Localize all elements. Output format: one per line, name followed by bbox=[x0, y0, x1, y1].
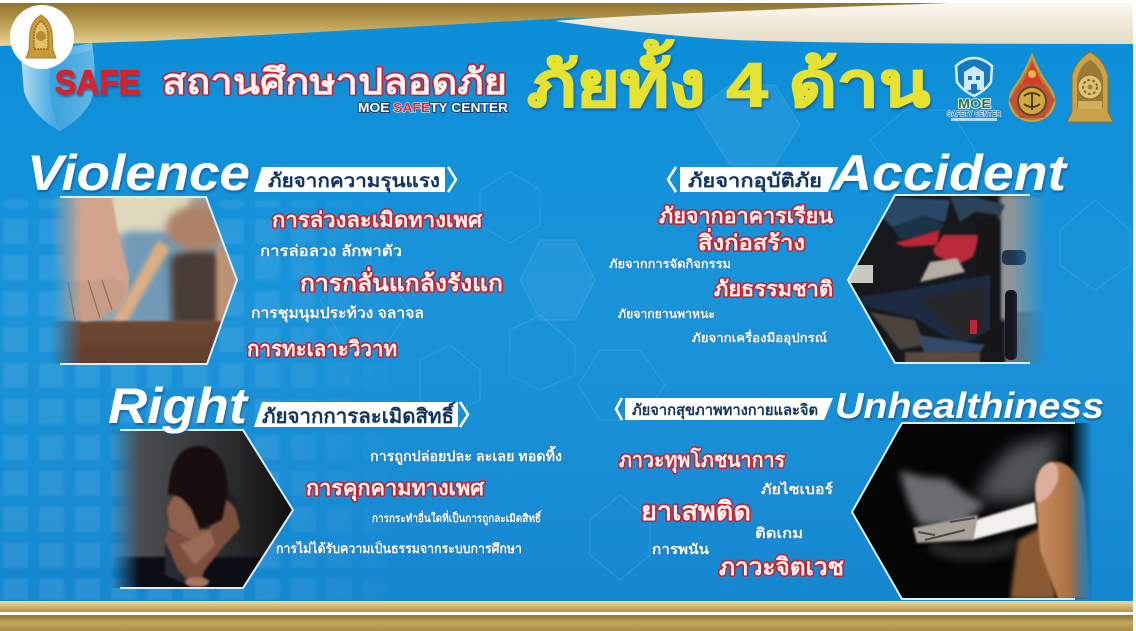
item: สิ่งก่อสร้าง bbox=[698, 227, 805, 255]
logo: MOE safety center: MOE bbox=[958, 96, 991, 111]
heading: Accident: Accident bbox=[830, 145, 1069, 201]
panel: right bbox=[100, 378, 562, 592]
logo: red and gold seal bbox=[1009, 55, 1055, 121]
title: SAFE: SAFE bbox=[55, 64, 140, 102]
panel: violence bbox=[27, 145, 503, 371]
photo border bbox=[848, 195, 1030, 363]
item: การล่วงละเมิดทางเพศ bbox=[272, 209, 483, 232]
photo: girl hugging knees bbox=[111, 430, 292, 588]
item: ภัยจากยานพาหนะ bbox=[618, 307, 715, 321]
photo: burning cigarette bbox=[850, 423, 1095, 601]
item: ภัยธรรมชาติ bbox=[714, 278, 833, 301]
item: การกระทำอื่นใดที่เป็นการถูกละเมิดสิทธิ์ bbox=[372, 510, 542, 526]
photo border bbox=[120, 430, 293, 588]
item: ภัยจากเครื่องมืออุปกรณ์ bbox=[692, 329, 827, 346]
item: การคุกคามทางเพศ bbox=[306, 477, 485, 502]
logo: gold emblem bbox=[1067, 52, 1113, 122]
item: การชุมนุมประท้วง จลาจล bbox=[251, 305, 424, 323]
tag: violence danger: ภัยจากความรุนแรง bbox=[268, 171, 440, 193]
cream swoosh bbox=[555, 3, 1133, 44]
item: การทะเลาะวิวาท bbox=[247, 338, 397, 361]
item: ภัยจากการจัดกิจกรรม bbox=[609, 257, 731, 271]
item: การกลั่นแกล้งรังแก bbox=[300, 266, 503, 296]
item: ภาวะทุพโภชนาการ bbox=[619, 447, 786, 474]
item: ติดเกม bbox=[755, 525, 803, 541]
item: ภัยจากอาคารเรียน bbox=[659, 204, 834, 228]
tag: accident danger: ภัยจากอุบัติภัย bbox=[688, 171, 822, 193]
photo border bbox=[852, 423, 1075, 599]
tag: rights violation danger: ภัยจากการละเมิดสิทธิ์ bbox=[262, 401, 456, 428]
tag: accident danger bbox=[668, 167, 838, 193]
item: การล่อลวง ลักพาตัว bbox=[260, 243, 402, 260]
title: four dangers: ภัยทั้ง 4 ด้าน bbox=[527, 39, 930, 120]
tag: physical and mental health danger: ภัยจากสุขภาพทางกายและจิต bbox=[632, 401, 818, 420]
shield graphic bbox=[21, 43, 95, 131]
item: การไม่ได้รับความเป็นธรรมจากระบบการศึกษา bbox=[276, 539, 522, 556]
photo border bbox=[60, 197, 237, 364]
photo: damaged car bbox=[845, 195, 1050, 367]
item: การถูกปล่อยปละ ละเลย ทอดทิ้ง bbox=[370, 445, 562, 465]
tag: physical and mental health danger bbox=[616, 398, 833, 420]
item: ภาวะจิตเวช bbox=[719, 554, 844, 581]
bottom gold band bbox=[0, 601, 1136, 631]
tag: violence danger bbox=[254, 167, 456, 193]
photo: fist and frightened person bbox=[52, 197, 236, 364]
title: school safety: สถานศึกษาปลอดภัย bbox=[162, 61, 507, 102]
heading: Right: Right bbox=[108, 378, 250, 434]
heading: Violence: Violence bbox=[27, 145, 250, 201]
panel: accident bbox=[609, 145, 1069, 367]
heading: Unhealthiness: Unhealthiness bbox=[835, 385, 1104, 426]
subtitle: MOE SAFETY CENTER: MOE SAFETY CENTER bbox=[358, 100, 509, 115]
item: การพนัน bbox=[652, 541, 709, 557]
logo: MOE safety center bbox=[947, 58, 1001, 121]
item: ยาเสพติด bbox=[641, 496, 751, 526]
panel: unhealthiness bbox=[616, 385, 1104, 601]
circle logo: ministry emblem bbox=[10, 5, 74, 69]
logo: MOE safety center: SAFETY CENTER bbox=[947, 111, 1001, 118]
item: ภัยไซเบอร์ bbox=[761, 480, 834, 497]
